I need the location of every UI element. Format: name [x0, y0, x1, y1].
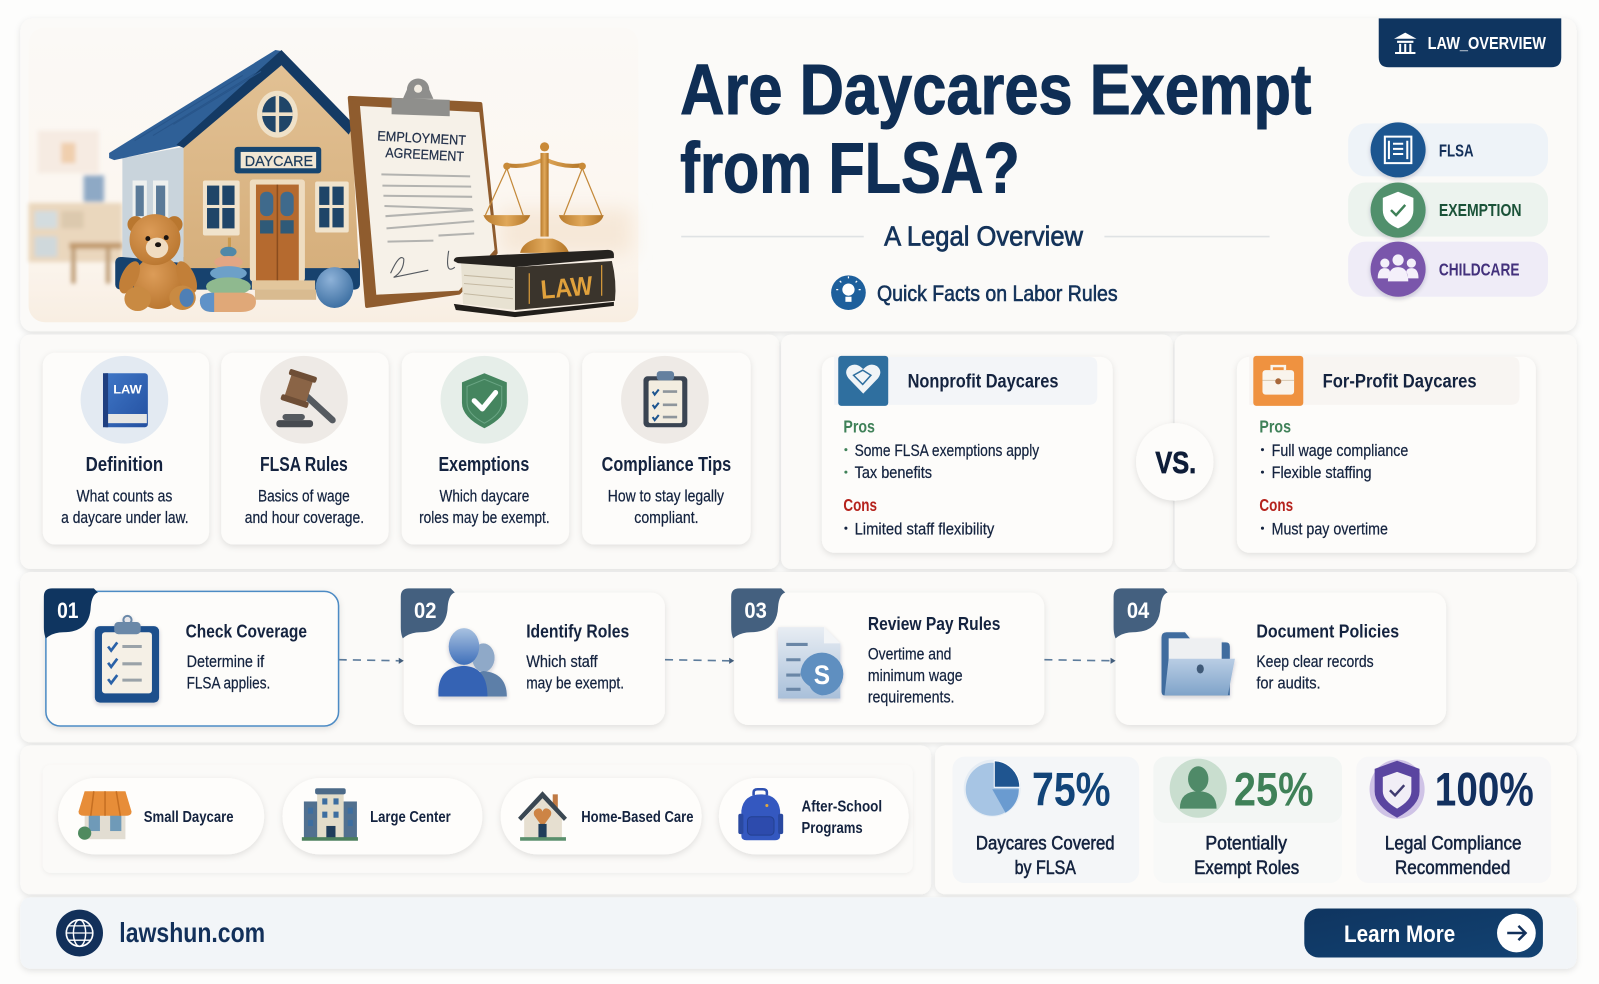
tag: exemption	[1348, 183, 1548, 238]
panel: hero	[20, 18, 1577, 331]
icon: gavel	[276, 369, 332, 427]
ball	[316, 267, 353, 308]
tag: FLSA	[1348, 122, 1548, 177]
icon: heart handshake	[838, 356, 888, 406]
icon: checklist	[643, 371, 687, 427]
stat: 100 percent	[1356, 757, 1551, 883]
step 03: Review Pay Rules	[868, 613, 1000, 634]
card: nonprofit daycares: Tax benefits	[855, 464, 932, 482]
blurred classroom background	[29, 131, 122, 283]
step 03: minimum wage	[868, 667, 963, 685]
pill: after-school programs: After-School	[802, 799, 882, 816]
tag: FLSA: FLSA	[1439, 141, 1474, 161]
VS badge: VS.	[1155, 446, 1196, 480]
icon: pay document: S	[814, 660, 830, 690]
card: nonprofit daycares: Limited staff flexibility	[855, 520, 995, 538]
icon: store	[78, 791, 132, 840]
icon: people	[438, 628, 507, 696]
stat: 25 percent	[1153, 757, 1342, 883]
round window	[257, 91, 298, 138]
card: nonprofit daycares: Some FLSA exemptions apply	[855, 442, 1040, 460]
stat: 100 percent: 100%	[1435, 764, 1534, 816]
card: nonprofit daycares: Nonprofit Daycares	[908, 370, 1059, 392]
scales of justice	[483, 142, 604, 253]
card: FLSA rules	[221, 353, 389, 545]
icon: shield	[462, 373, 507, 428]
pill: home-based care: Home-Based Care	[581, 809, 693, 826]
icon: building	[302, 788, 358, 841]
step 03: requirements.	[868, 689, 955, 707]
icon: clipboard	[95, 616, 159, 703]
teddy bear	[115, 214, 201, 311]
step 01	[44, 588, 339, 726]
card: FLSA rules: FLSA Rules	[260, 454, 348, 476]
stat: 75 percent: Daycares Covered	[976, 832, 1115, 854]
card: exemptions: Exemptions	[439, 454, 529, 476]
card: FLSA rules: and hour coverage.	[245, 509, 364, 527]
card: for-profit daycares: For-Profit Daycares	[1323, 370, 1477, 392]
hero illustration	[29, 28, 638, 322]
card: nonprofit daycares	[822, 356, 1113, 553]
stat: 100 percent: Legal Compliance	[1385, 832, 1521, 854]
card: for-profit daycares: Cons	[1259, 495, 1293, 515]
clipboard: EMPLOYMENT	[377, 128, 467, 148]
stat: 25 percent: Exempt Roles	[1194, 857, 1299, 879]
card: for-profit daycares	[1237, 356, 1536, 553]
icon: backpack	[738, 789, 783, 840]
step 02: Identify Roles	[526, 620, 629, 641]
step 01: 01	[57, 598, 79, 623]
person icon	[1170, 759, 1227, 818]
pill: after-school programs	[719, 778, 909, 854]
quick facts	[831, 275, 1118, 310]
icon: law book	[103, 373, 148, 427]
card: FLSA rules: Basics of wage	[258, 488, 350, 506]
tag: exemption: EXEMPTION	[1439, 200, 1521, 220]
law book: LAW	[539, 270, 594, 305]
card: for-profit daycares: Must pay overtime	[1272, 520, 1388, 538]
icon: folder	[1162, 632, 1235, 695]
pill: large center: Large Center	[370, 809, 451, 826]
step 02: may be exempt.	[526, 674, 624, 692]
step 03: 03	[744, 598, 767, 623]
step 04	[1114, 588, 1446, 725]
panel: daycare types	[20, 745, 931, 894]
door	[250, 179, 316, 300]
stat: 25 percent: 25%	[1234, 764, 1313, 816]
tag: childcare: CHILDCARE	[1439, 259, 1519, 279]
connector arrows	[339, 658, 1116, 664]
step 04: Keep clear records	[1256, 653, 1374, 671]
card: definition	[43, 353, 209, 545]
step 02: 02	[414, 598, 436, 623]
pill: small daycare	[58, 778, 264, 854]
card: nonprofit daycares: Cons	[843, 495, 877, 515]
pill: home-based care	[501, 778, 702, 854]
step 02	[401, 588, 665, 725]
icon: globe	[56, 910, 103, 956]
card: compliance tips: How to stay legally	[608, 488, 725, 506]
button: learn more: Learn More	[1344, 921, 1455, 948]
stat: 75 percent: 75%	[1032, 764, 1111, 816]
card: definition: Definition	[86, 454, 163, 476]
panel: nonprofit	[781, 334, 1173, 569]
card: exemptions	[402, 353, 569, 545]
house	[109, 50, 360, 300]
stat: 100 percent: Recommended	[1395, 857, 1510, 879]
footer: lawshun.com	[119, 917, 265, 948]
pill: small daycare: Small Daycare	[144, 809, 234, 826]
panel: steps	[20, 572, 1577, 742]
card: for-profit daycares: Full wage compliance	[1272, 442, 1408, 460]
stacking toy	[200, 238, 256, 312]
step 04: 04	[1127, 598, 1150, 623]
pill: after-school programs: Programs	[802, 820, 863, 837]
card: exemptions: roles may be exempt.	[419, 509, 550, 527]
title: Are Daycares Exempt	[680, 50, 1311, 130]
daycare sign	[235, 147, 321, 173]
daycare sign: DAYCARE	[245, 154, 313, 170]
card: exemptions: Which daycare	[440, 488, 529, 506]
card: for-profit daycares: Flexible staffing	[1272, 464, 1372, 482]
step 02: Which staff	[526, 653, 598, 671]
step 01: FLSA applies.	[187, 674, 270, 692]
step 04: for audits.	[1256, 674, 1321, 692]
step 04: Document Policies	[1256, 620, 1399, 641]
step 01: Check Coverage	[186, 620, 307, 641]
panel: for-profit	[1175, 334, 1577, 569]
stat: 75 percent: by FLSA	[1015, 857, 1076, 879]
clipboard: AGREEMENT	[385, 145, 465, 164]
stat: 75 percent	[952, 757, 1139, 883]
title	[680, 50, 1311, 209]
clipboard	[350, 79, 496, 306]
step 03: Overtime and	[868, 646, 951, 664]
law book	[454, 250, 616, 317]
footer	[20, 897, 1577, 969]
card: definition: What counts as	[76, 488, 172, 506]
icon: home heart	[518, 791, 567, 841]
icon: law book: LAW	[113, 383, 142, 397]
panel: topics	[20, 334, 779, 569]
tag: childcare	[1348, 242, 1548, 297]
title: from FLSA?	[680, 129, 1020, 209]
stat: 25 percent: Potentially	[1205, 832, 1287, 854]
pill: large center	[282, 778, 482, 854]
card: nonprofit daycares: Pros	[843, 416, 875, 436]
card: compliance tips: Compliance Tips	[602, 454, 731, 476]
badge: law overview	[1379, 18, 1561, 67]
badge: law overview: LAW_OVERVIEW	[1428, 33, 1547, 53]
icon: pay document	[778, 627, 843, 698]
pie chart icon	[964, 760, 1021, 817]
card: definition: a daycare under law.	[61, 509, 189, 527]
quick facts: Quick Facts on Labor Rules	[877, 281, 1118, 306]
button: learn more	[1304, 909, 1543, 957]
step 01: Determine if	[187, 653, 265, 671]
card: compliance tips	[582, 353, 751, 545]
card: for-profit daycares: Pros	[1259, 416, 1291, 436]
VS badge	[1136, 423, 1214, 501]
shield icon	[1370, 760, 1425, 819]
step 03	[731, 588, 1044, 725]
windows	[133, 180, 349, 236]
subtitle: A Legal Overview	[884, 221, 1083, 252]
icon: briefcase	[1253, 356, 1303, 406]
card: compliance tips: compliant.	[634, 509, 699, 527]
panel: statistics	[935, 745, 1577, 894]
